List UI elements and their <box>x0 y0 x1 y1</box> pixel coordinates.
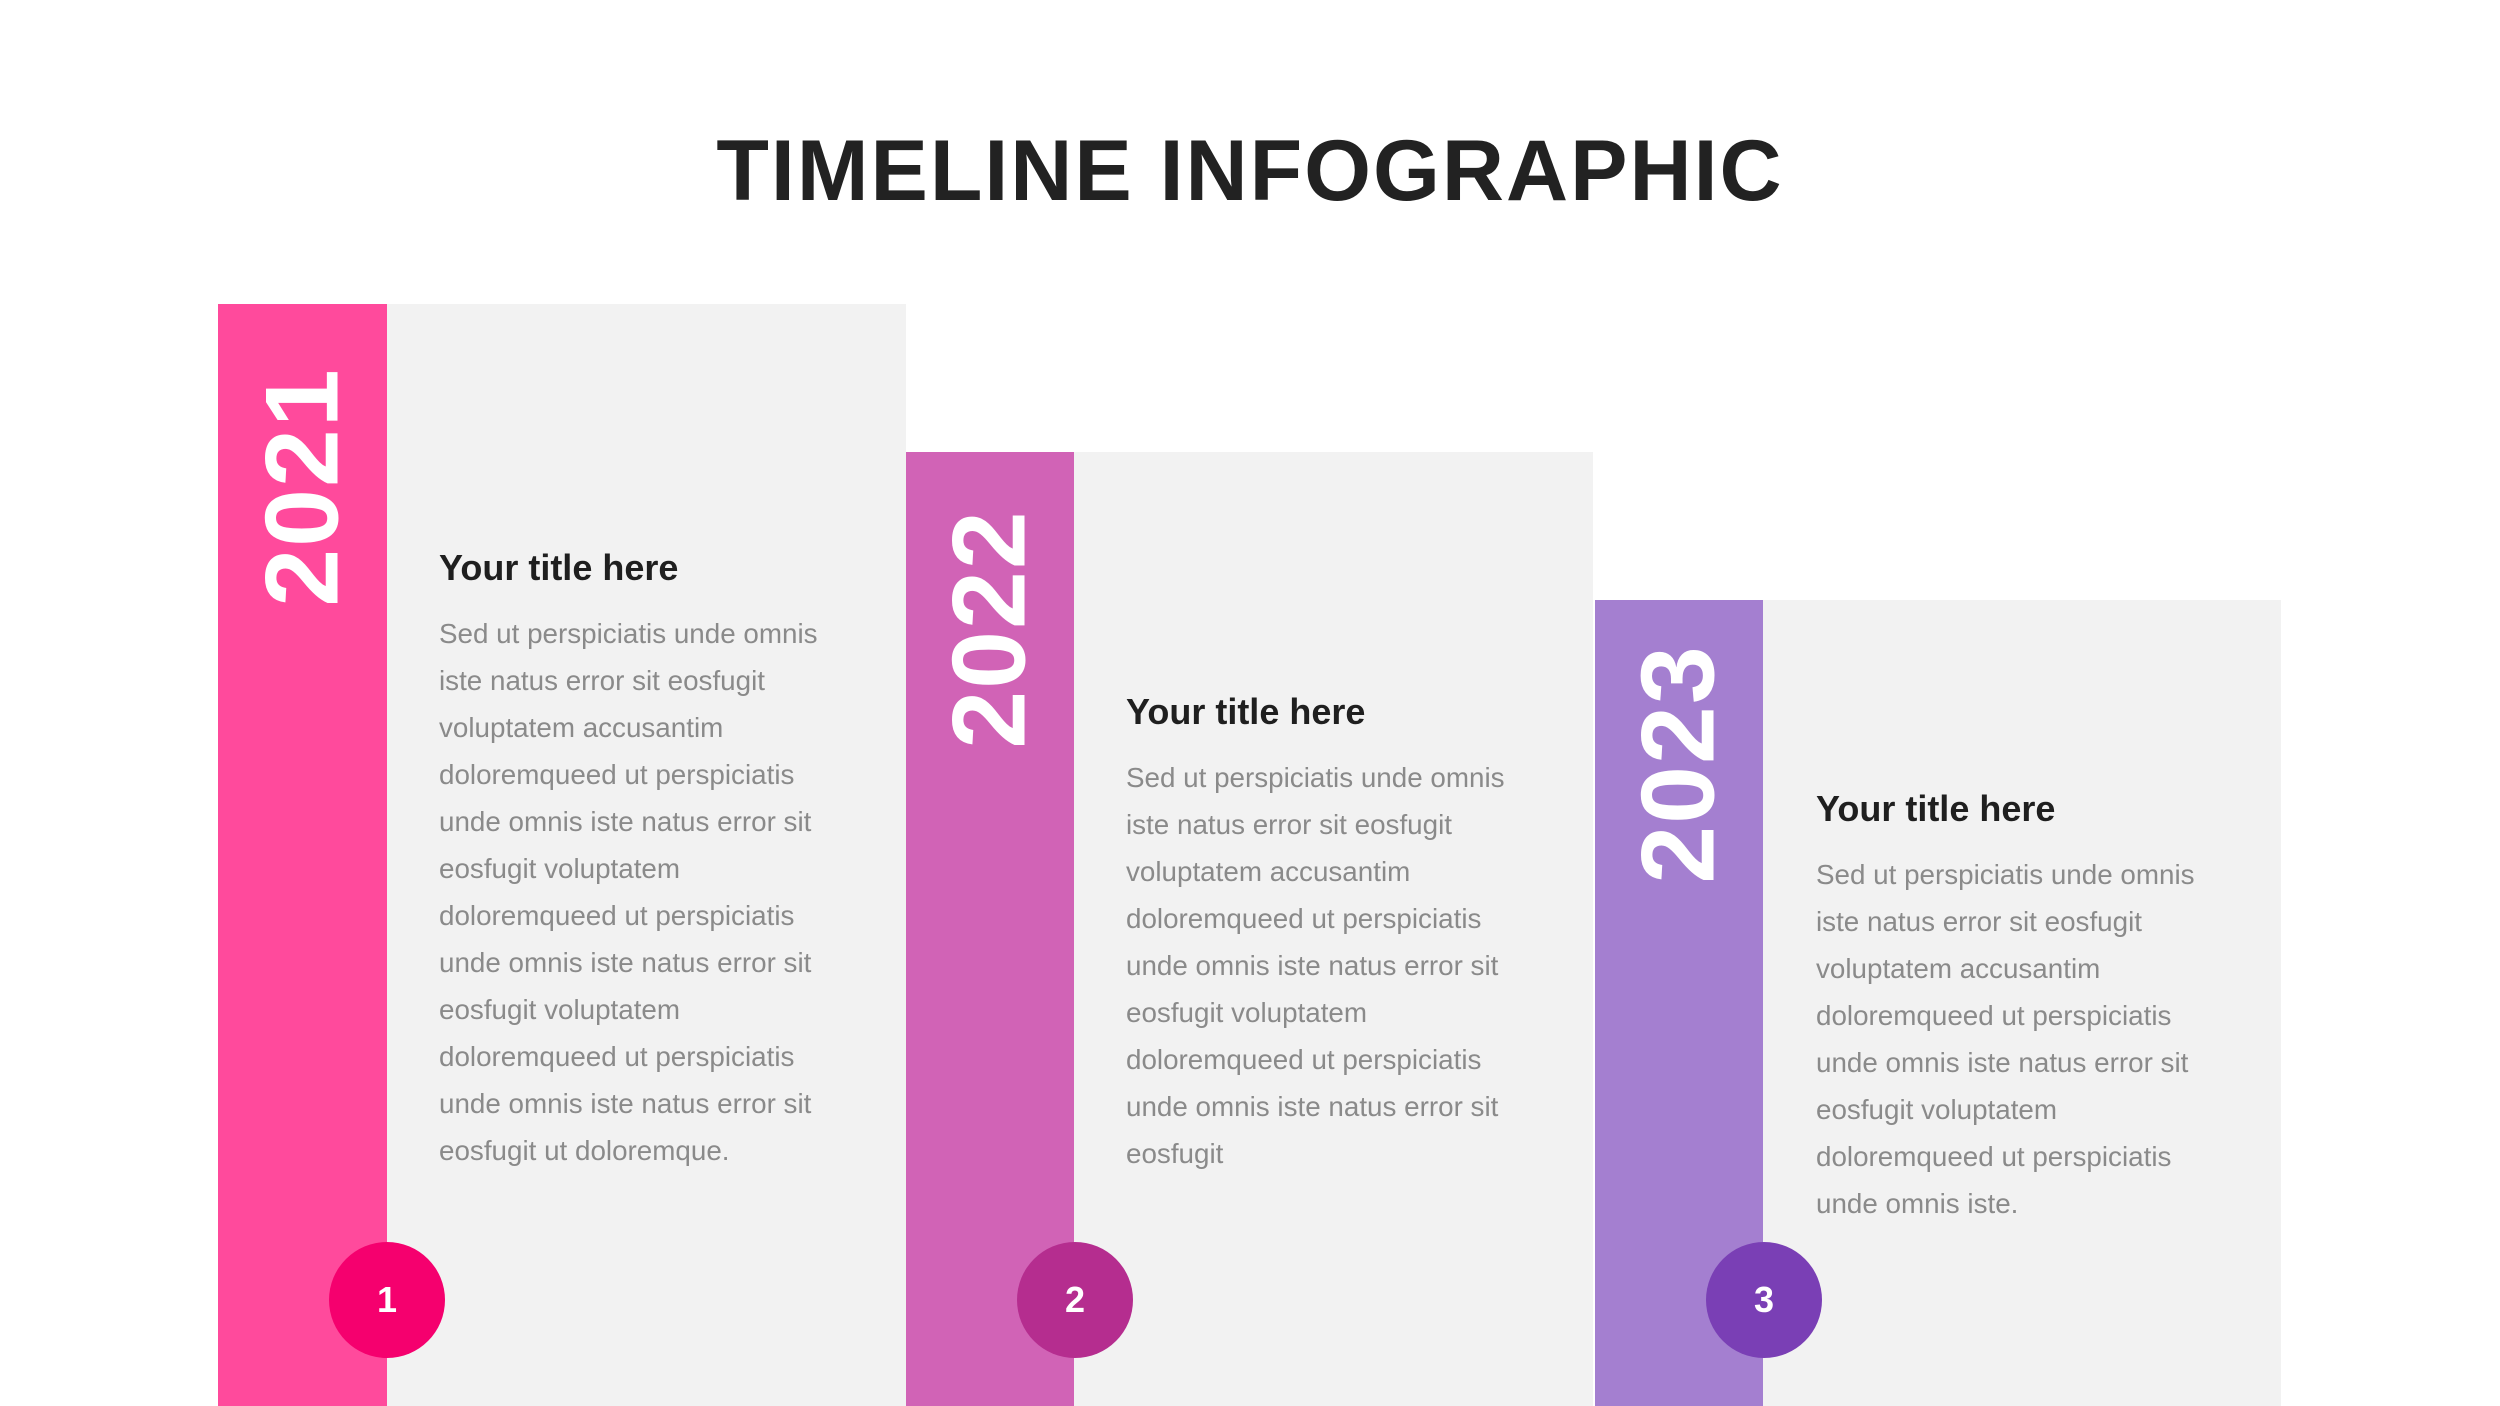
number circle: 1 <box>377 1279 397 1320</box>
number circle: 2 <box>1065 1279 1085 1320</box>
panel background <box>218 304 906 1406</box>
body text: Sed ut perspiciatis unde omnis <box>439 618 818 649</box>
body text <box>1126 762 1505 1169</box>
title: TIMELINE INFOGRAPHIC <box>716 123 1784 219</box>
body text: eosfugit voluptatem <box>439 853 680 884</box>
year label: 2021 <box>244 367 360 607</box>
body text: eosfugit <box>1126 1138 1223 1169</box>
body text: Sed ut perspiciatis unde omnis <box>1126 762 1505 793</box>
body text: Sed ut perspiciatis unde omnis <box>1816 859 2195 890</box>
body text: eosfugit voluptatem <box>439 994 680 1025</box>
body text: unde omnis iste natus error sit <box>439 806 811 837</box>
body text: unde omnis iste natus error sit <box>1126 1091 1498 1122</box>
heading: Your title here <box>439 547 678 588</box>
body text: iste natus error sit eosfugit <box>439 665 765 696</box>
body text: unde omnis iste natus error sit <box>1126 950 1498 981</box>
panel background <box>906 452 1593 1406</box>
heading: Your title here <box>1126 691 1365 732</box>
body text: voluptatem accusantim <box>439 712 723 743</box>
year label: 2022 <box>932 509 1048 749</box>
panel: 2021 <box>218 304 906 1406</box>
panel background <box>1595 600 2281 1406</box>
body text: unde omnis iste natus error sit <box>1816 1047 2188 1078</box>
body text <box>1816 859 2195 1219</box>
body text <box>439 618 818 1166</box>
number circle <box>1706 1242 1822 1358</box>
body text: voluptatem accusantim <box>1816 953 2100 984</box>
body text: voluptatem accusantim <box>1126 856 1410 887</box>
panel: 2022 <box>906 452 1593 1406</box>
number circle <box>1017 1242 1133 1358</box>
body text: eosfugit voluptatem <box>1126 997 1367 1028</box>
year label: 2023 <box>1620 644 1736 884</box>
body text: eosfugit ut doloremque. <box>439 1135 730 1166</box>
body text: iste natus error sit eosfugit <box>1126 809 1452 840</box>
color stripe <box>906 452 1074 1406</box>
number circle: 3 <box>1754 1279 1774 1320</box>
color stripe <box>218 304 387 1406</box>
body text: unde omnis iste. <box>1816 1188 2018 1219</box>
body text: doloremqueed ut perspiciatis <box>1126 903 1481 934</box>
body text: iste natus error sit eosfugit <box>1816 906 2142 937</box>
panel: 2023 <box>1595 600 2281 1406</box>
body text: doloremqueed ut perspiciatis <box>439 759 794 790</box>
body text: unde omnis iste natus error sit <box>439 1088 811 1119</box>
body text: doloremqueed ut perspiciatis <box>1816 1141 2171 1172</box>
body text: eosfugit voluptatem <box>1816 1094 2057 1125</box>
body text: doloremqueed ut perspiciatis <box>1126 1044 1481 1075</box>
number circle <box>329 1242 445 1358</box>
body text: doloremqueed ut perspiciatis <box>439 900 794 931</box>
heading: Your title here <box>1816 788 2055 829</box>
body text: doloremqueed ut perspiciatis <box>439 1041 794 1072</box>
color stripe <box>1595 600 1763 1406</box>
body text: doloremqueed ut perspiciatis <box>1816 1000 2171 1031</box>
body text: unde omnis iste natus error sit <box>439 947 811 978</box>
